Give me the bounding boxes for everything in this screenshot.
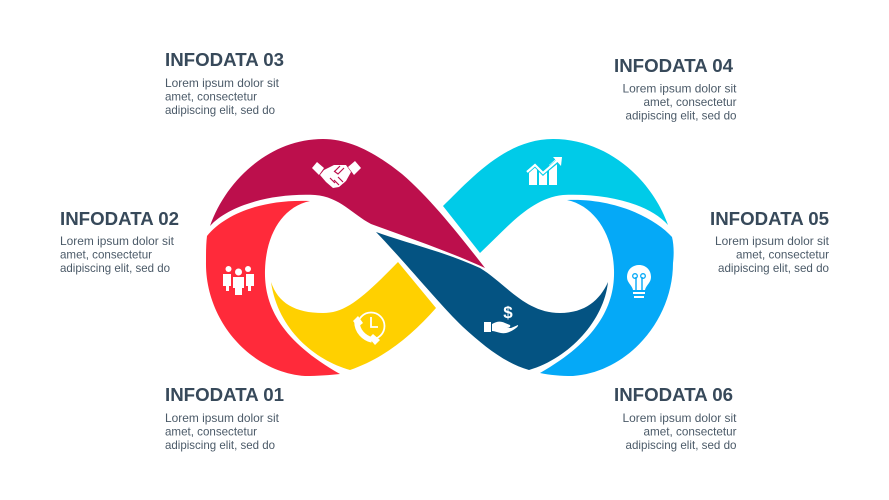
text block: infodata 04 (614, 56, 737, 122)
icon: handshake (312, 161, 361, 188)
segment: cyan (443, 139, 668, 253)
text block: infodata 04: amet, consectetur (644, 95, 737, 109)
text block: infodata 03 (165, 50, 284, 117)
text block: infodata 06: adipiscing elit, sed do (626, 438, 737, 452)
icon: hand with dollar: $ (503, 303, 513, 322)
text block: infodata 03: Lorem ipsum dolor sit (165, 76, 280, 90)
text block: infodata 01 (165, 385, 284, 452)
text block: infodata 01: Lorem ipsum dolor sit (165, 411, 280, 425)
segment: blue (540, 200, 674, 376)
text block: infodata 01: adipiscing elit, sed do (165, 438, 275, 452)
text block: infodata 05 (710, 209, 830, 275)
icon: people (223, 266, 254, 295)
text block: infodata 06: Lorem ipsum dolor sit (622, 411, 737, 425)
icon: hand with dollar (484, 303, 518, 333)
text block: infodata 03: adipiscing elit, sed do (165, 103, 275, 117)
text block: infodata 04: INFODATA 04 (614, 56, 733, 76)
text block: infodata 05: INFODATA 05 (710, 209, 829, 229)
segment: red (206, 201, 340, 376)
icon: phone and clock (353, 312, 384, 345)
text block: infodata 02: Lorem ipsum dolor sit (60, 234, 175, 248)
icon: light bulb (627, 265, 651, 297)
text block: infodata 01: INFODATA 01 (165, 385, 284, 405)
text block: infodata 02: amet, consectetur (60, 248, 152, 262)
segment: yellow (271, 262, 436, 370)
segment: navy (376, 232, 608, 370)
infinity diagram (206, 139, 674, 376)
text block: infodata 06 (614, 385, 737, 452)
text block: infodata 03: amet, consectetur (165, 90, 257, 104)
text block: infodata 03: INFODATA 03 (165, 50, 284, 70)
text block: infodata 05: Lorem ipsum dolor sit (715, 234, 830, 248)
text block: infodata 02 (60, 209, 179, 275)
text block: infodata 02: INFODATA 02 (60, 209, 179, 229)
segment: crimson (210, 139, 485, 268)
text block: infodata 01: amet, consectetur (165, 424, 257, 438)
text block: infodata 06: INFODATA 06 (614, 385, 733, 405)
text block: infodata 04: Lorem ipsum dolor sit (622, 82, 737, 96)
text block: infodata 02: adipiscing elit, sed do (60, 261, 170, 275)
text block: infodata 04: adipiscing elit, sed do (626, 108, 737, 122)
text block: infodata 06: amet, consectetur (644, 424, 737, 438)
icon: chart (527, 157, 562, 185)
text block: infodata 05: adipiscing elit, sed do (718, 261, 829, 275)
text block: infodata 05: amet, consectetur (736, 248, 829, 262)
